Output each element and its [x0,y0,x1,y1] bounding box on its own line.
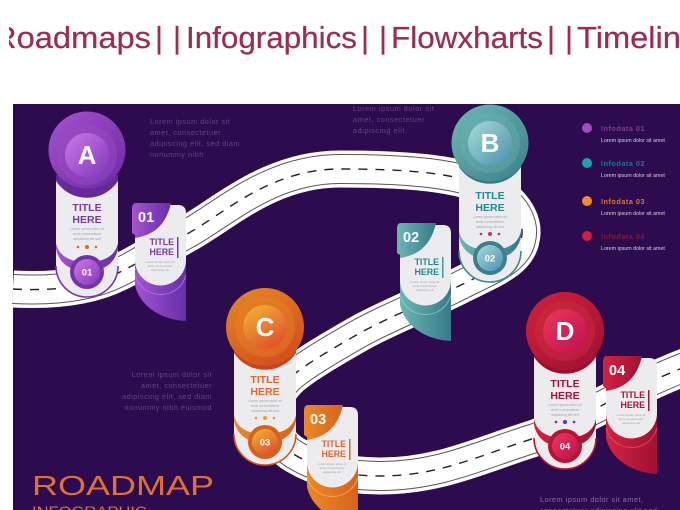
text block: left middle lorem: adipiscing elit, sed diam [122,392,212,401]
text block: top middle lorem [353,104,434,135]
small text: amet consectetuer [320,466,344,470]
card small text: amet consectetuer [476,220,505,224]
header banner text: || [155,20,181,55]
number: 02 [403,230,419,246]
card small text: adipiscing elit sed [73,237,101,241]
small text: Lorem ipsum dolor sit [617,413,646,417]
title: ROADMAP INFOGRAPHIC: ROADMAP [32,470,214,501]
small text: amet consectetuer [148,264,172,268]
card title: TITLE [550,378,580,390]
card small text: adipiscing elit sed [476,225,504,229]
winding road [13,169,680,476]
header banner text: Infographics [186,20,357,55]
legend item 2 [582,158,665,179]
legend item 2: Infodata 02 [601,159,645,168]
text block: top middle lorem: adipiscing elit. [353,126,408,135]
flag card 01 [132,203,186,321]
dots [255,416,275,420]
card small text: adipiscing elit sed [551,413,579,417]
medallion 03: 03 [260,438,270,448]
medallion 03 [248,425,282,459]
number: 04 [609,363,625,379]
legend item 1 [582,123,665,144]
small text: adipiscing elit [416,288,434,292]
card small text: Lorem ipsum dolor sit [70,227,104,231]
card small text [473,215,507,229]
text block: top left lorem: adipiscing elit, sed diam [150,139,240,148]
header banner text: || [547,20,573,55]
medallion 04 [548,429,582,463]
small text [318,462,346,474]
milestone card B [452,104,528,282]
title [621,390,645,410]
card small text: amet consectetuer [551,408,580,412]
medallion 01: 01 [82,268,93,278]
letter D: D [556,316,574,346]
header banner text [0,20,680,55]
letter B: B [481,128,499,158]
header banner text: || [361,20,387,55]
text block: bottom right lorem [540,495,657,510]
legend item 4 [582,231,665,252]
title: TITLE [150,237,174,247]
small text: adipiscing elit [151,268,169,272]
number: 03 [310,412,326,428]
card small text [70,227,104,241]
milestone card B: HERE [475,202,505,214]
legend item 2: Lorem ipsum dolor sit amet [601,173,665,179]
title: HERE [415,267,439,277]
legend item 4: Lorem ipsum dolor sit amet [601,246,665,252]
letter C: C [256,312,275,342]
title: TITLE [415,257,439,267]
dark background panel [13,104,680,510]
text block: top left lorem: amet, consectetuer [150,128,221,137]
card small text: Lorem ipsum dolor sit [248,399,282,403]
medallion 02 [473,241,507,275]
small text: amet consectetuer [619,417,643,421]
title [150,237,174,257]
title: TITLE [322,439,346,449]
flag card 04 [603,356,657,474]
text block: top middle lorem: Lorem ipsum dolor sit [353,104,434,113]
small text: adipiscing elit [323,470,341,474]
title: HERE [150,247,174,257]
text block: left middle lorem [122,370,212,412]
dots [480,232,500,236]
text block: bottom right lorem: Lorem ipsum dolor sit amet, [540,495,644,504]
title: TITLE [621,390,645,400]
flag card 03 [304,405,358,510]
small text: amet consectetuer [413,284,437,288]
legend item 1: Lorem ipsum dolor sit amet [601,138,665,144]
card small text: Lorem ipsum dolor sit [473,215,507,219]
text block: left middle lorem: nonummy nibh euismod [125,403,212,412]
card small text: amet consectetuer [251,404,280,408]
legend item 3: Lorem ipsum dolor sit amet [601,211,665,217]
dots [77,245,97,249]
letter A: A [78,140,97,170]
milestone card C [226,288,304,465]
title [322,439,346,459]
small text: Lorem ipsum dolor sit [146,260,174,264]
dots [555,420,575,424]
card title: TITLE [475,190,505,202]
title: HERE [322,449,346,459]
milestone card C: HERE [250,386,280,398]
milestone card D [526,292,604,469]
card title: TITLE [250,374,280,386]
milestone card A [48,112,126,297]
small text [146,260,174,272]
header banner text: Flowxharts [391,20,543,55]
title [415,257,439,277]
title: ROADMAP INFOGRAPHIC [32,470,214,510]
text block: left middle lorem: amet, consectetuer [141,381,212,390]
text block: top left lorem: nonummy nibh [150,150,204,159]
legend item 4: Infodata 04 [601,232,645,241]
small text: adipiscing elit [622,421,640,425]
card small text: adipiscing elit sed [251,409,279,413]
card small text [248,399,282,413]
legend item 1: Infodata 01 [601,124,645,133]
number: 01 [138,210,154,226]
milestone card D: HERE [550,390,580,402]
title: HERE [621,400,645,410]
legend item 3 [582,196,665,217]
card small text: Lorem ipsum dolor sit [548,403,582,407]
text block: top left lorem [150,117,240,159]
small text [617,413,646,425]
medallion 04: 04 [560,442,571,452]
small text [411,280,440,292]
small text: Lorem ipsum dolor sit [411,280,440,284]
flag card 02 [397,223,451,341]
card title: TITLE [72,202,102,214]
milestone card A: HERE [72,214,102,226]
card small text: amet consectetuer [73,232,102,236]
legend [582,123,665,252]
card small text [548,403,582,417]
medallion 02: 02 [485,254,495,264]
legend item 3: Infodata 03 [601,197,645,206]
text block: top left lorem: Lorem ipsum dolor sit [150,117,230,126]
small text: Lorem ipsum dolor sit [318,462,346,466]
text block: left middle lorem: Lorem ipsum dolor sit [132,370,212,379]
text block: top middle lorem: amet, consectetuer [353,115,425,124]
medallion 01 [70,255,104,289]
